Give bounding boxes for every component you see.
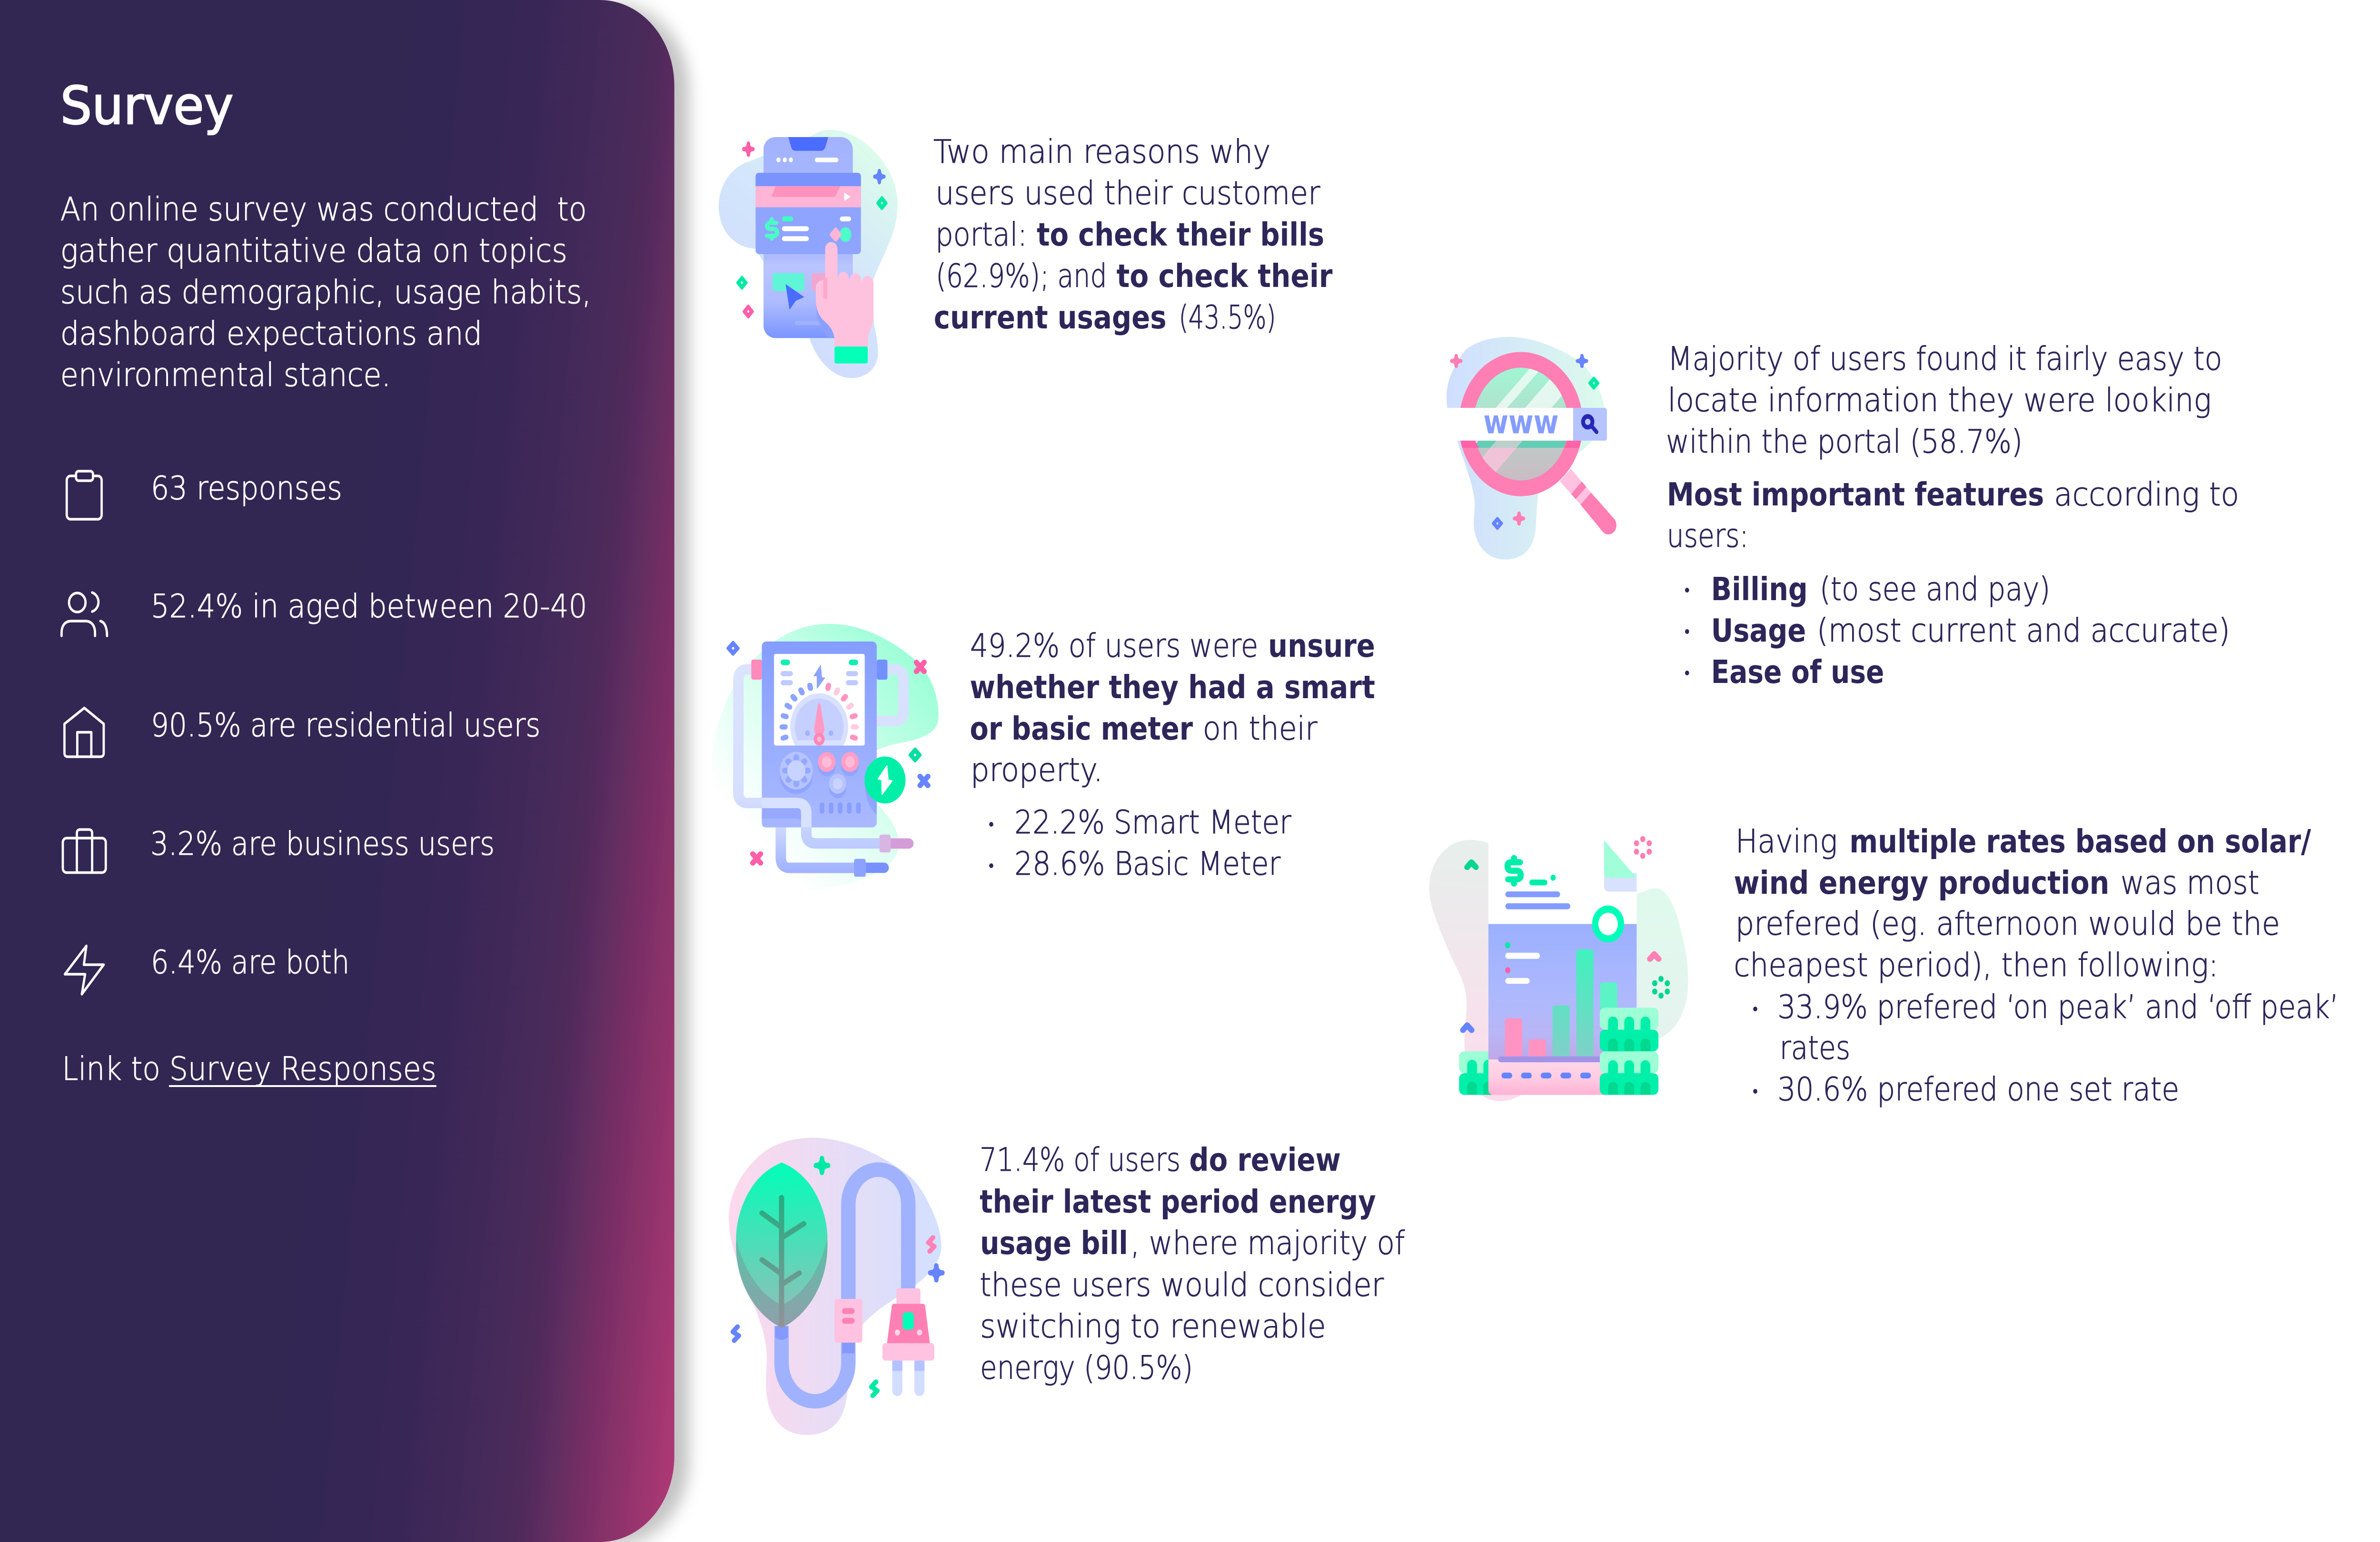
- text: bill review: [980, 1141, 1405, 1387]
- intro paragraph: such as demographic, usage habits,: [60, 274, 591, 311]
- text: bill review: , where majority of: [1130, 1225, 1405, 1262]
- text: finding information and features: (most current and accurate): [1817, 612, 2230, 650]
- text: multiple rates preference: wind energy production: [1734, 864, 2109, 901]
- text: multiple rates preference: rates: [1780, 1029, 1850, 1067]
- text: customer portal reasons: to check their: [1116, 257, 1333, 295]
- blob: [1447, 337, 1605, 560]
- illustration: billing document with chart and money: [1429, 836, 1688, 1101]
- sparkles: [736, 141, 888, 318]
- plug: [883, 1288, 934, 1396]
- text: bill review: usage bill: [980, 1225, 1128, 1262]
- right blob: [1636, 888, 1688, 1044]
- heading: Survey: Survey: [60, 76, 233, 137]
- text: multiple rates preference: 33.9% prefered ‘on peak’ and ‘off peak’: [1777, 988, 2339, 1026]
- stat: responses: 63 responses: [151, 470, 342, 507]
- text: multiple rates preference: was most: [2121, 864, 2260, 902]
- right money stacks: [1600, 1008, 1658, 1095]
- illustration: leaf and plug: [729, 1137, 945, 1435]
- text: finding information and features: (to see and pay): [1820, 571, 2050, 608]
- text: multiple rates preference: multiple rates based on solar/: [1849, 823, 2311, 860]
- document: [1488, 840, 1636, 924]
- text: smart or basic meter: 28.6% Basic Meter: [1014, 845, 1281, 883]
- stat: business: 3.2% are business users: [150, 825, 495, 863]
- text: multiple rates preference: prefered (eg. afternoon would be the: [1735, 905, 2280, 943]
- cable clamp: [834, 1299, 863, 1343]
- text: multiple rates preference: Having: [1735, 823, 1837, 860]
- search bar: [1447, 404, 1607, 442]
- text: customer portal reasons: (43.5%): [1179, 299, 1276, 336]
- text: customer portal reasons: [933, 133, 1333, 336]
- text: finding information and features: locate information they were looking: [1667, 382, 2211, 419]
- text: smart or basic meter: property.: [971, 751, 1103, 789]
- stat: residential: 90.5% are residential users: [151, 707, 540, 744]
- document footer: [1488, 1057, 1616, 1095]
- left money stack: [1459, 1051, 1501, 1095]
- text: customer portal reasons: (62.9%); and: [936, 257, 1107, 295]
- blob: [712, 624, 939, 890]
- text: smart or basic meter: whether they had a smart: [970, 669, 1375, 706]
- icon: briefcase: [63, 830, 106, 873]
- sparkles: [726, 641, 928, 863]
- link to survey responses: Link to: [62, 1050, 160, 1088]
- text: finding information and features: [1666, 340, 2239, 691]
- icon: clipboard: [67, 471, 102, 519]
- text: customer portal reasons: users used their customer: [935, 175, 1320, 212]
- text: finding information and features: according to: [2054, 476, 2239, 514]
- magnifier handle: [1560, 469, 1616, 534]
- text: bill review: these users would consider: [980, 1266, 1384, 1304]
- stat: age: 52.4% in aged between 20-40: [151, 588, 587, 625]
- text: finding information and features: within the portal (58.7%): [1666, 423, 2023, 461]
- text: bill review: energy (90.5%): [980, 1349, 1193, 1387]
- text: multiple rates preference: 30.6% prefered one set rate: [1777, 1071, 2179, 1108]
- text: customer portal reasons: portal:: [935, 216, 1027, 254]
- text: smart or basic meter: [970, 627, 1375, 883]
- cable: [775, 1170, 908, 1401]
- intro paragraph: An online survey was conducted to: [60, 191, 587, 228]
- text: finding information and features: Usage: [1711, 612, 1806, 649]
- link to survey responses: [62, 1050, 436, 1088]
- card: [755, 173, 861, 254]
- text: smart or basic meter: on their: [1203, 710, 1318, 748]
- text: smart or basic meter: 49.2% of users were: [970, 627, 1258, 665]
- control knobs: [780, 752, 861, 814]
- lower probes: [781, 828, 913, 877]
- sparkles: chevrons and dot rings: [1463, 836, 1670, 1030]
- phone: [764, 137, 853, 338]
- intro paragraph: [60, 191, 591, 394]
- link to survey responses: Survey Responses: [169, 1050, 436, 1088]
- text: bill review: 71.4% of users: [980, 1141, 1180, 1179]
- text: finding information and features: users:: [1667, 517, 1749, 555]
- text: finding information and features: Most important features: [1667, 476, 2044, 513]
- text: multiple rates preference: cheapest period), then following:: [1734, 947, 2219, 984]
- text: finding information and features: Ease of use: [1711, 653, 1884, 691]
- text: finding information and features: Billing: [1711, 571, 1808, 608]
- blob: [729, 1137, 942, 1435]
- illustration: phone and hand: [719, 130, 898, 378]
- text: customer portal reasons: to check their bills: [1037, 216, 1324, 253]
- text: finding information and features: Majority of users found it fairly easy to: [1667, 340, 2222, 378]
- search bar: www: [1483, 404, 1559, 442]
- intro paragraph: dashboard expectations and: [60, 315, 482, 353]
- intro paragraph: gather quantitative data on topics: [60, 232, 567, 270]
- blob: [719, 130, 898, 378]
- text: smart or basic meter: unsure: [1268, 627, 1375, 664]
- ring shadow band: [1458, 441, 1584, 448]
- text: bill review: their latest period energy: [980, 1183, 1376, 1220]
- illustration: magnifier with www search bar: [1447, 337, 1616, 560]
- text: bill review: switching to renewable: [980, 1308, 1326, 1345]
- text: multiple rates preference: [1734, 823, 2339, 1108]
- intro paragraph: environmental stance.: [60, 356, 391, 394]
- sparkles: [733, 1156, 945, 1395]
- ring marker: [1592, 906, 1624, 942]
- icon: green bolt badge: [864, 756, 905, 814]
- display with gauge: [774, 654, 865, 746]
- text: smart or basic meter: 22.2% Smart Meter: [1014, 804, 1291, 841]
- icon: people: [61, 593, 107, 636]
- cables: [738, 669, 903, 843]
- leaf: [736, 1163, 827, 1328]
- meter body: [751, 642, 887, 828]
- illustration: electricity meter: [712, 624, 939, 890]
- bar chart panel: [1488, 924, 1636, 1059]
- text: customer portal reasons: current usages: [934, 299, 1167, 336]
- text: customer portal reasons: Two main reasons why: [933, 133, 1270, 171]
- icon: house: [64, 708, 104, 757]
- text: smart or basic meter: or basic meter: [970, 710, 1193, 747]
- sparkles: [1450, 354, 1599, 530]
- icon: lightning bolt: [65, 946, 104, 994]
- hand: [816, 242, 873, 364]
- panel background: [0, 0, 674, 1542]
- text: bill review: do review: [1189, 1141, 1341, 1178]
- left blob: [1429, 840, 1522, 1101]
- stat: both: 6.4% are both: [151, 944, 349, 981]
- panel: survey sidebar: [0, 0, 674, 1542]
- magnifier ring: [1459, 352, 1583, 496]
- lens: [1476, 367, 1566, 481]
